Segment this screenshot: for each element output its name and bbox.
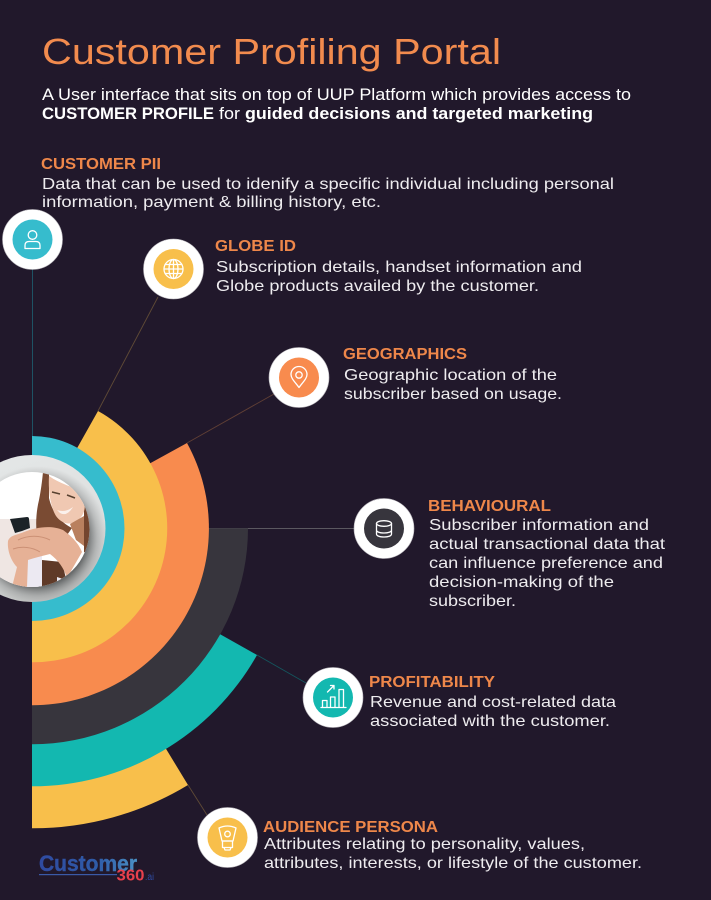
- intro text: A User interface that sits on top of UUP Platform which provides access to: [42, 86, 631, 104]
- text block: profitability: [369, 674, 616, 730]
- text block: geographics: subscriber based on usage.: [344, 386, 562, 403]
- hair strand and body of hair: [36, 473, 72, 534]
- intro text: guided decisions and targeted marketing: [245, 105, 593, 123]
- text block: audience persona: attributes, interests, or lifestyle of the customer.: [264, 855, 642, 872]
- title: Customer Profiling Portal: [42, 31, 501, 72]
- text block: globe id: Subscription details, handset information and: [216, 259, 582, 276]
- segment: behavioural: [32, 528, 248, 744]
- text block: audience persona: [263, 819, 642, 872]
- text block: customer pii: CUSTOMER PII: [41, 156, 161, 173]
- text block: audience persona: Attributes relating to personality, values,: [264, 836, 585, 853]
- connector lines: [32, 268, 355, 815]
- icon: audience persona: [198, 808, 258, 868]
- segment: geographics: [32, 443, 209, 705]
- intro text: [42, 86, 631, 123]
- text block: customer pii: [41, 156, 614, 211]
- intro text: CUSTOMER PROFILE: [42, 105, 214, 123]
- logo: customer360.ai: .ai: [145, 872, 154, 883]
- phone: [10, 517, 30, 533]
- icon: customer pii person: [2, 210, 62, 270]
- shirt: [27, 556, 42, 587]
- logo: customer360.ai: [39, 851, 154, 884]
- text block: profitability: Revenue and cost-related data: [370, 694, 616, 711]
- text block: customer pii: information, payment & billing history, etc.: [42, 194, 381, 211]
- semicircular segmented chart: [32, 411, 257, 828]
- text block: behavioural: [428, 498, 666, 610]
- neck: [70, 516, 84, 546]
- text block: profitability: PROFITABILITY: [369, 674, 496, 691]
- segment: audience persona: [32, 528, 188, 828]
- icon: database: [354, 498, 414, 558]
- text block: globe id: GLOBE ID: [215, 238, 296, 255]
- segment: customer pii: [32, 436, 124, 621]
- text block: behavioural: actual transactional data that: [429, 536, 666, 553]
- icon: globe: [144, 239, 204, 299]
- face: [49, 476, 85, 523]
- icon: location pin: [269, 348, 329, 408]
- logo: customer360.ai: 360: [116, 868, 144, 884]
- hands and forearm: [8, 527, 82, 587]
- text block: audience persona: AUDIENCE PERSONA: [263, 819, 438, 836]
- text block: customer pii: Data that can be used to idenify a specific individual including personal: [42, 176, 614, 193]
- text block: geographics: Geographic location of the: [344, 367, 557, 384]
- text block: behavioural: can influence preference and: [429, 555, 663, 572]
- text block: geographics: [343, 346, 562, 403]
- intro text: for: [219, 105, 241, 123]
- segment: globe id: [32, 411, 167, 662]
- text block: globe id: Globe products availed by the customer.: [216, 278, 539, 295]
- text block: behavioural: subscriber.: [429, 593, 516, 610]
- segment: profitability: [32, 528, 257, 786]
- text block: geographics: GEOGRAPHICS: [343, 346, 467, 363]
- text block: behavioural: Subscriber information and: [429, 517, 649, 534]
- text block: behavioural: decision-making of the: [429, 574, 614, 591]
- text block: profitability: associated with the customer.: [370, 713, 610, 730]
- logo: customer360.ai: Customer: [39, 851, 137, 876]
- text block: globe id: [215, 238, 582, 295]
- text block: behavioural: BEHAVIOURAL: [428, 498, 551, 515]
- icon: rising bar chart: [303, 668, 363, 728]
- photo of woman using a phone: [0, 455, 106, 602]
